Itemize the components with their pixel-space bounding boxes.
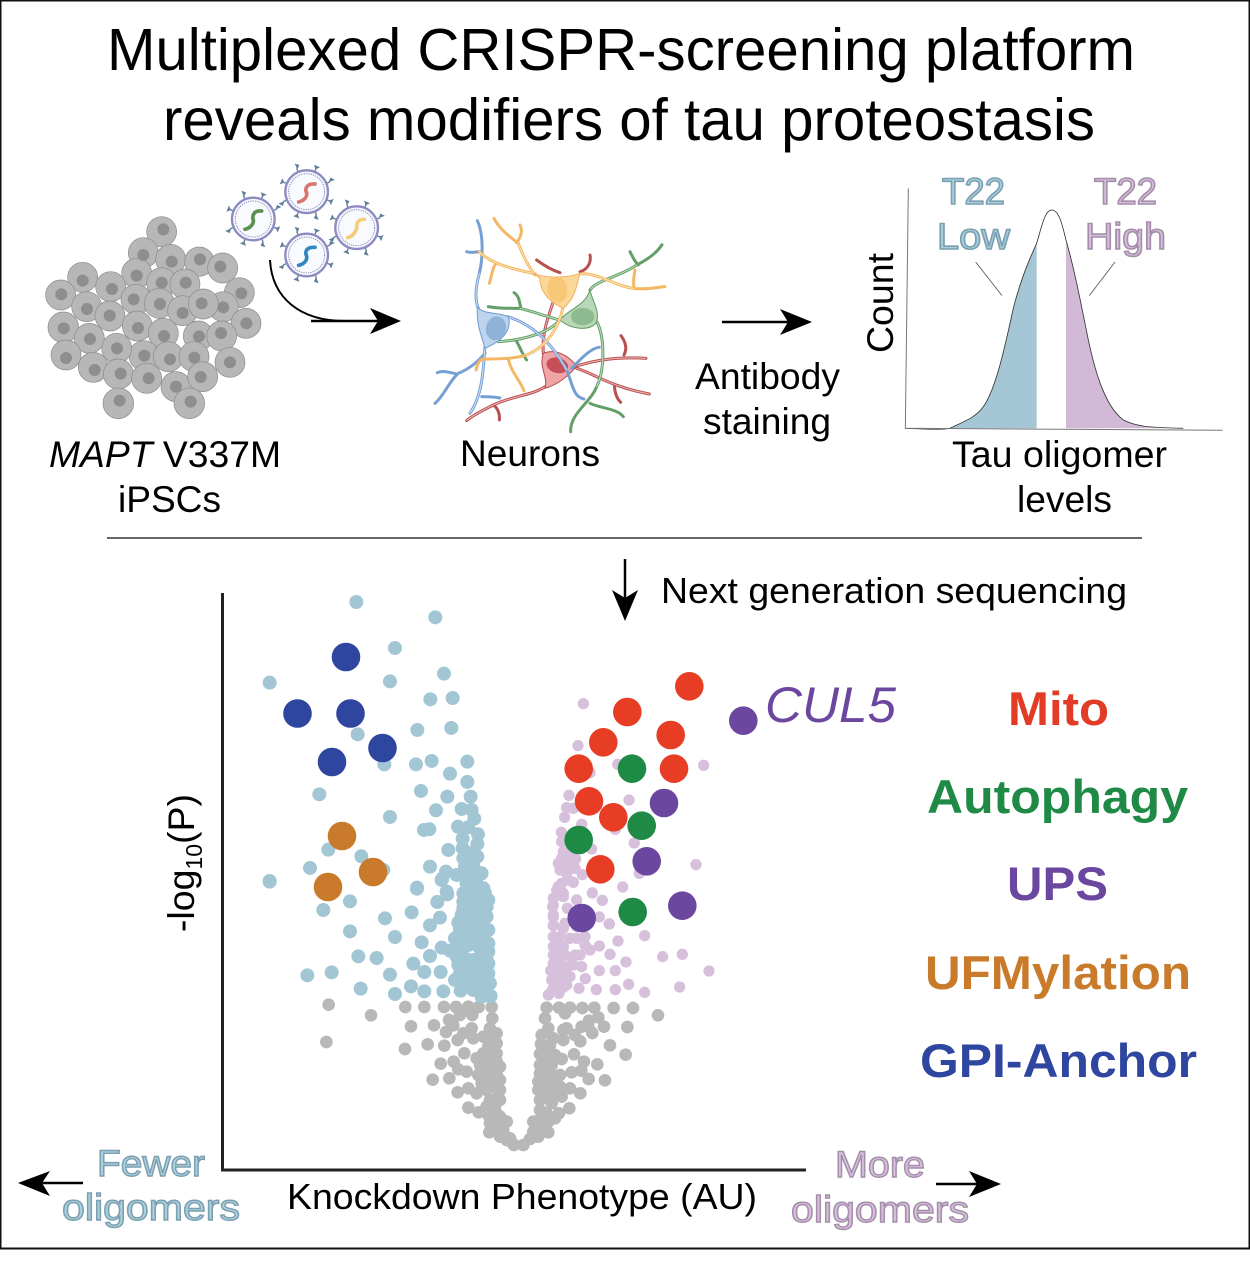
neuron: orange <box>476 218 665 391</box>
legend: pathways: UPS <box>1007 857 1108 910</box>
title: Multiplexed CRISPR-screening platform <box>107 17 1135 83</box>
axes <box>222 593 806 1170</box>
arrow: sequencing <box>612 559 638 621</box>
icon: lentivirus particles <box>217 156 393 291</box>
icon: neurons <box>435 218 665 432</box>
area: T22 high <box>1066 240 1167 428</box>
label: more oligomers <box>791 1144 969 1230</box>
y axis label: (P) <box>160 794 202 844</box>
arrow: to staining <box>722 309 812 335</box>
dots: UPS hits <box>567 706 758 932</box>
label: Tau oligomer levels: Tau oligomer <box>952 434 1167 475</box>
label: MAPT V337M iPSCs: MAPT V337M <box>49 434 281 475</box>
icon: iPSC colony <box>46 217 261 419</box>
callout lines <box>976 262 1115 296</box>
dots: fewer oligomers <box>270 602 491 997</box>
label: Count: Count <box>859 252 901 353</box>
neuron: green <box>488 245 662 432</box>
label: T22 High <box>1085 171 1166 257</box>
y axis label: -log <box>160 870 202 932</box>
arrow: infection <box>270 260 401 334</box>
label: Tau oligomer levels: levels <box>1017 479 1112 520</box>
x axis label: Knockdown Phenotype (AU) <box>287 1176 757 1217</box>
area: T22 low <box>950 243 1037 428</box>
neuron: red <box>467 255 649 421</box>
title <box>107 17 1135 153</box>
label: T22 Low: Low <box>937 216 1010 257</box>
label: T22 Low <box>937 171 1010 257</box>
dots: UFMylation hits <box>314 822 387 901</box>
dots: more oligomers <box>548 704 709 995</box>
dots: GPI-anchor hits <box>283 643 397 776</box>
label: more oligomers: oligomers <box>791 1189 969 1230</box>
legend: pathways: UFMylation <box>925 946 1191 999</box>
legend: pathways: Mito <box>1008 682 1109 735</box>
label: Neurons: Neurons <box>460 433 600 474</box>
label: MAPT V337M iPSCs: iPSCs <box>118 479 221 520</box>
axes <box>905 188 1223 430</box>
arrow: left <box>18 1171 83 1196</box>
label: CUL5: CUL5 <box>765 677 896 733</box>
arrow: right <box>936 1171 1001 1197</box>
label: Antibody staining: Antibody <box>695 356 840 397</box>
legend: pathways: GPI-Anchor <box>920 1034 1197 1087</box>
label: T22 High: T22 <box>1094 171 1157 212</box>
label: Tau oligomer levels <box>952 434 1167 520</box>
dots: mito hits <box>564 672 704 884</box>
label: fewer oligomers: oligomers <box>62 1187 240 1228</box>
label: T22 Low: T22 <box>942 171 1005 212</box>
label: fewer oligomers: Fewer <box>97 1143 205 1184</box>
label: fewer oligomers <box>62 1143 240 1228</box>
dots: not significant <box>326 1005 658 1145</box>
title: reveals modifiers of tau proteostasis <box>163 87 1095 153</box>
chart: volcano plot <box>222 593 806 1170</box>
label: Antibody staining <box>695 356 840 442</box>
label: Antibody staining: staining <box>703 401 831 442</box>
label: more oligomers: More <box>835 1144 925 1185</box>
dots: autophagy hits <box>564 754 656 926</box>
y axis label: 10 <box>181 844 207 870</box>
label: Next generation sequencing: Next generation sequencing <box>661 570 1127 611</box>
label: T22 High: High <box>1085 216 1166 257</box>
chart: tau oligomer distribution <box>905 188 1223 430</box>
legend: pathways <box>920 682 1197 1087</box>
legend: pathways: Autophagy <box>927 770 1188 823</box>
neuron: blue <box>435 221 599 413</box>
label: MAPT V337M iPSCs <box>49 434 281 520</box>
curve <box>905 210 1183 429</box>
